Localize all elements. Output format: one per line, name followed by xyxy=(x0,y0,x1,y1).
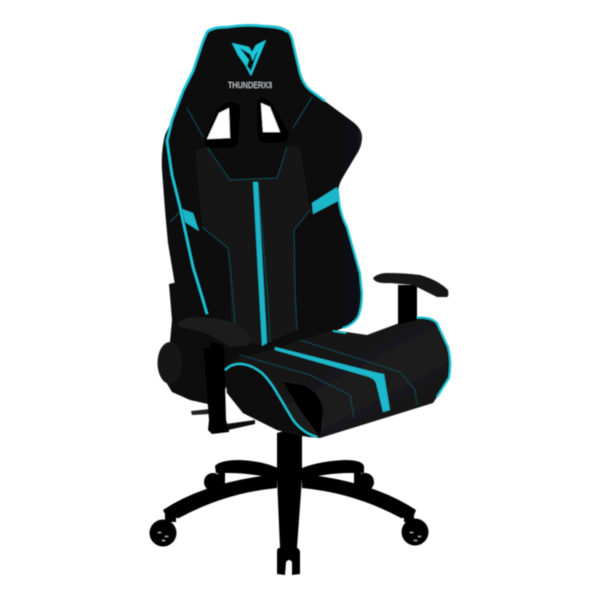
post height button xyxy=(197,338,210,348)
five-star base xyxy=(150,431,428,575)
right armrest xyxy=(373,273,448,325)
front leg xyxy=(277,478,302,548)
right arm post xyxy=(398,285,417,325)
seat tilt bar xyxy=(226,420,255,430)
logo mark xyxy=(232,40,266,76)
backrest shell xyxy=(162,24,362,350)
backrest seams xyxy=(170,97,312,342)
recline knob xyxy=(158,342,182,384)
right front caster xyxy=(402,518,428,546)
centre seat stripe xyxy=(275,347,390,412)
caster stems xyxy=(165,472,414,522)
back left leg xyxy=(215,460,278,479)
logo wordmark: THUNDERX3 xyxy=(228,81,272,90)
right cyan wedge xyxy=(312,187,340,214)
centre panel xyxy=(195,145,310,345)
right headrest slot xyxy=(261,103,280,132)
seat cushion xyxy=(225,318,450,438)
caster hub highlights xyxy=(158,532,421,541)
left arm pad xyxy=(178,317,250,347)
chair artwork xyxy=(150,24,450,575)
seat xyxy=(225,318,450,438)
right back caster xyxy=(356,473,374,491)
lower right cyan piping xyxy=(338,190,362,328)
seat seams xyxy=(240,340,417,418)
left cyan wedge xyxy=(182,209,199,231)
right seat piping xyxy=(413,318,450,397)
gas lift column xyxy=(277,431,302,480)
left bolster xyxy=(225,363,317,437)
left headrest slot frame xyxy=(205,102,240,148)
right headrest slot frame xyxy=(257,98,289,143)
seat front fold xyxy=(283,382,323,437)
right arm pad xyxy=(373,273,448,297)
recline mechanism xyxy=(158,282,292,415)
left armrest xyxy=(178,317,255,434)
ThunderX3 logo xyxy=(228,40,272,90)
right leg xyxy=(302,474,416,518)
left headrest slot xyxy=(207,108,230,139)
left seat piping xyxy=(225,364,317,437)
left cyan piping xyxy=(167,25,287,314)
left arm post xyxy=(203,340,229,434)
rear seat piping xyxy=(333,331,346,333)
left leg xyxy=(163,474,277,518)
centre cyan stripe xyxy=(253,182,267,346)
recline lever xyxy=(191,409,210,415)
left back caster xyxy=(204,473,222,491)
upper right cyan piping xyxy=(287,30,325,101)
backrest to seat join xyxy=(205,335,292,392)
side plate xyxy=(160,282,212,405)
back right leg xyxy=(302,460,364,480)
front caster xyxy=(277,548,300,575)
left front caster xyxy=(150,520,176,546)
backrest xyxy=(162,24,362,350)
